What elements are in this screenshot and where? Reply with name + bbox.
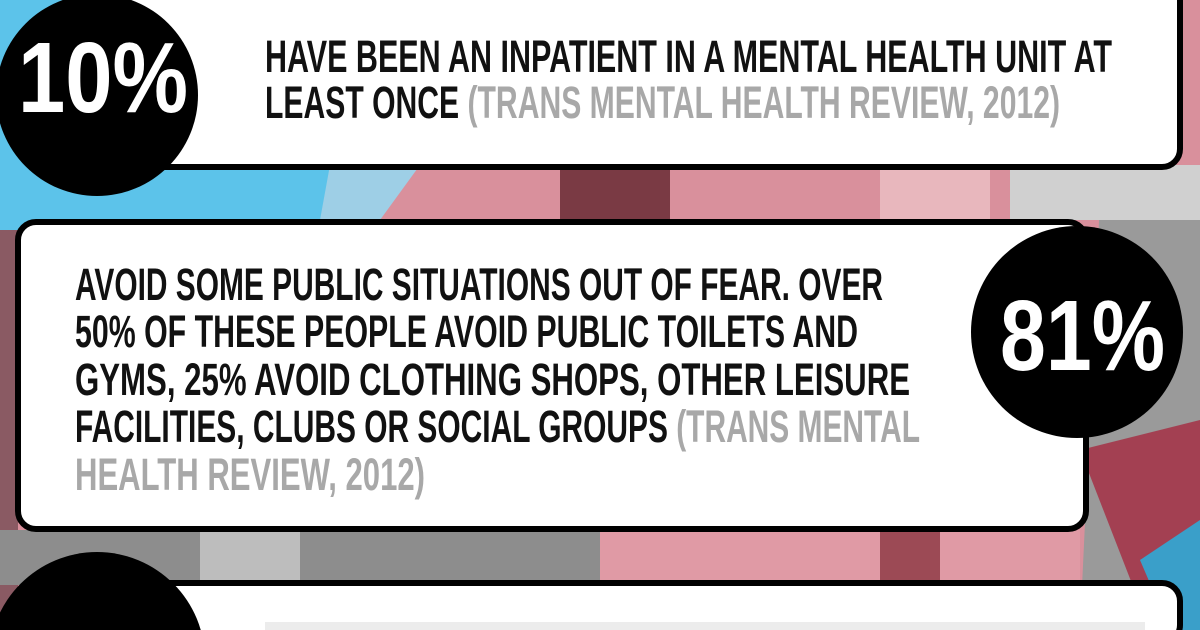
circle: 10%: 10% — [18, 22, 188, 134]
panel: box 2 — [18, 222, 1086, 529]
text: box 1 statement — [265, 31, 1112, 128]
circle: 10% — [0, 0, 198, 196]
text: box 2 statement — [75, 259, 920, 500]
circle: 81% — [971, 226, 1183, 438]
text: box 2 statement: FACILITIES, CLUBS OR SOCIAL GROUPS (TRANS MENTAL — [75, 401, 920, 452]
panel: box 1 — [120, 0, 1180, 167]
panel: box 3 — [120, 583, 1180, 630]
text: box 3 faint line — [265, 622, 1145, 630]
circle: 81%: 81% — [1000, 280, 1165, 392]
text: box 2 statement: HEALTH REVIEW, 2012) — [75, 449, 425, 500]
circle: 3rd stat — [0, 552, 205, 630]
